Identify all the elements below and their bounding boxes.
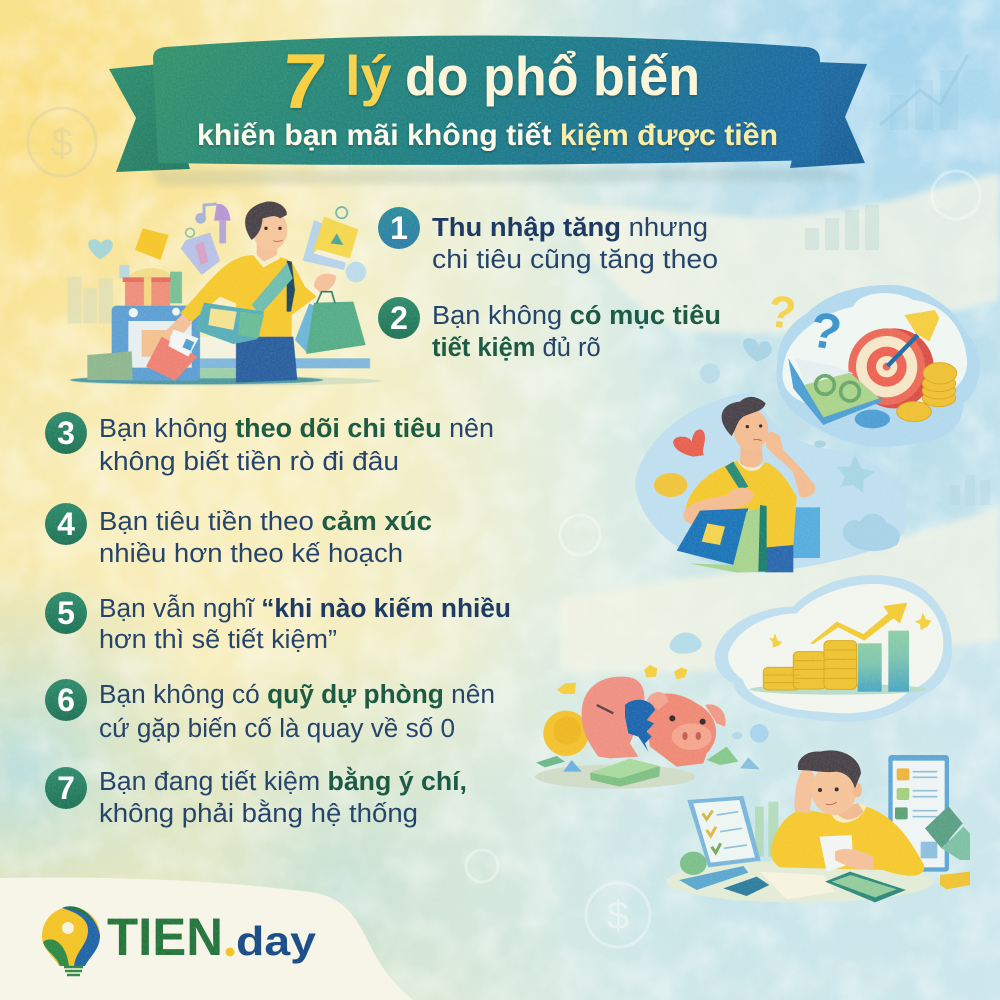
bars xyxy=(858,631,909,692)
badge 3: 3 xyxy=(57,415,75,451)
list item 6 xyxy=(45,679,495,743)
coin stack xyxy=(897,363,957,422)
blue blob xyxy=(635,392,908,573)
heart xyxy=(88,239,113,259)
thought cloud xyxy=(715,575,952,722)
banner left tail xyxy=(109,64,190,172)
growth arrow xyxy=(810,603,907,644)
badge 2: 2 xyxy=(390,300,408,336)
question marks: ? xyxy=(765,285,799,339)
text 3: Bạn không theo dõi chi tiêu nên xyxy=(99,415,494,443)
faded city bars xyxy=(67,277,113,323)
ground shadow xyxy=(535,765,695,789)
clipboard xyxy=(687,796,761,867)
text 4: Bạn tiêu tiền theo cảm xúc xyxy=(99,508,432,536)
list item 2 xyxy=(378,297,721,362)
raised arm and hand xyxy=(795,768,815,813)
star and cloud decorations xyxy=(700,338,900,551)
badge 1: 1 xyxy=(390,210,408,246)
notebook with money xyxy=(788,358,882,425)
coin xyxy=(654,473,687,497)
banner shadow xyxy=(150,168,860,186)
small coin xyxy=(855,410,890,428)
money card xyxy=(825,872,906,902)
badge 1 xyxy=(378,207,420,249)
logo: day xyxy=(236,918,316,964)
left hand xyxy=(167,313,192,337)
text 7: Bạn đang tiết kiệm bằng ý chí, xyxy=(99,766,467,796)
icon: light bulb xyxy=(42,906,100,975)
list item 1: chi tiêu cũng tăng theo xyxy=(432,246,718,274)
yellow shirt xyxy=(685,461,797,547)
text 5: Bạn vẫn nghĩ “khi nào kiếm nhiều xyxy=(99,594,511,623)
heading line 2: khiến bạn mãi không tiết kiệm được tiền xyxy=(197,119,778,152)
blue shopping bag xyxy=(295,303,323,354)
text 1: Thu nhập tăng nhưng xyxy=(432,214,708,242)
paper in hand xyxy=(819,835,853,872)
sweater xyxy=(771,807,924,876)
title banner xyxy=(109,36,867,186)
red shopping bag xyxy=(146,329,199,381)
messenger bag xyxy=(195,303,264,344)
green wallet xyxy=(87,351,133,380)
piggy left half xyxy=(582,677,645,758)
bag straps xyxy=(252,261,295,315)
text 6: Bạn không có quỹ dự phòng nên xyxy=(99,681,495,709)
badge 6: 6 xyxy=(57,682,75,718)
logo xyxy=(42,906,316,975)
collar xyxy=(252,248,280,267)
green shopping bag xyxy=(688,505,767,573)
badge 4: 4 xyxy=(57,506,75,542)
list item 2: tiết kiệm đủ rõ xyxy=(432,334,601,362)
target xyxy=(848,328,934,408)
list item 5: hơn thì sẽ tiết kiệm” xyxy=(99,626,337,654)
yellow box xyxy=(135,228,169,260)
list item 7: không phải bằng hệ thống xyxy=(99,799,418,828)
trousers xyxy=(236,337,297,383)
sweater xyxy=(180,255,317,337)
badge 2 xyxy=(378,297,420,339)
piggy right half xyxy=(645,692,726,767)
top right bag xyxy=(303,207,358,270)
paper on table xyxy=(760,872,835,899)
scattered money xyxy=(536,747,760,772)
list item 5 xyxy=(45,592,511,654)
badge 6 xyxy=(45,679,87,721)
ground xyxy=(72,376,382,386)
badge 7: 7 xyxy=(57,770,75,806)
heading line 1: 7 xyxy=(277,37,330,125)
green cash pile xyxy=(680,852,707,875)
neck and head xyxy=(245,201,287,262)
raised arm xyxy=(766,432,815,497)
bubble xyxy=(346,262,366,282)
heart xyxy=(673,429,705,457)
question marks xyxy=(765,285,846,361)
question marks: ? xyxy=(806,301,846,361)
badge 5 xyxy=(45,592,87,634)
banner body xyxy=(153,36,820,165)
price tag xyxy=(181,228,220,275)
coins on table xyxy=(940,872,970,889)
floating money xyxy=(925,806,970,860)
list item 3: không biết tiền rò đi đâu xyxy=(99,448,399,476)
desk xyxy=(200,358,370,368)
chart behind xyxy=(755,802,778,857)
stars xyxy=(557,613,931,694)
collar xyxy=(832,803,867,823)
illustration: man shopping with bags xyxy=(67,201,382,386)
cloud decorations xyxy=(670,633,769,743)
footer panel xyxy=(0,878,413,1000)
badge 3 xyxy=(45,412,87,454)
shelf xyxy=(750,684,927,695)
money stack xyxy=(590,759,660,787)
hand xyxy=(835,849,873,869)
illustration: thinking man with goal cloud xyxy=(635,285,980,573)
head xyxy=(798,750,863,819)
gift box xyxy=(119,265,182,306)
collar xyxy=(737,460,764,471)
thought cloud xyxy=(777,285,980,447)
monitor xyxy=(112,306,200,381)
faint background icons: $ xyxy=(607,894,629,938)
green shopping bag xyxy=(306,292,366,354)
faint background icons: $ xyxy=(51,121,73,165)
list item 4 xyxy=(45,503,432,568)
list item 6: cứ gặp biến cố là quay về số 0 xyxy=(99,715,455,743)
text 2: Bạn không có mục tiêu xyxy=(432,302,721,330)
music note and lamp xyxy=(195,204,231,243)
bag emblem xyxy=(702,523,725,545)
coin stacks xyxy=(763,641,857,690)
list item 4: nhiều hơn theo kế hoạch xyxy=(99,540,403,568)
badge 5: 5 xyxy=(57,595,75,631)
heading line 1: lý xyxy=(345,44,392,107)
white screen xyxy=(200,337,237,358)
list item 3 xyxy=(45,412,494,476)
heading line 1 xyxy=(277,37,700,125)
broken crack xyxy=(625,700,655,752)
calculator xyxy=(679,866,769,896)
list item 7 xyxy=(45,766,467,828)
wordmark: TIEN xyxy=(107,908,223,967)
neck and head xyxy=(722,397,768,467)
gold coin xyxy=(543,711,589,756)
badge 7 xyxy=(45,767,87,809)
right shopping bag xyxy=(788,507,820,558)
tablet xyxy=(888,755,949,872)
badge 4 xyxy=(45,503,87,545)
illustration: piggy bank and stressed man xyxy=(535,575,970,902)
heading line 1: do phổ biến xyxy=(405,45,700,107)
trousers xyxy=(765,545,793,572)
strap xyxy=(725,462,748,490)
yellow flag and arrow xyxy=(888,310,939,366)
banner right tail xyxy=(790,62,867,168)
right hand xyxy=(314,273,336,293)
blue shopping bag xyxy=(677,508,748,565)
table xyxy=(667,861,933,902)
list item 1 xyxy=(378,207,718,274)
lower arm xyxy=(683,488,753,524)
